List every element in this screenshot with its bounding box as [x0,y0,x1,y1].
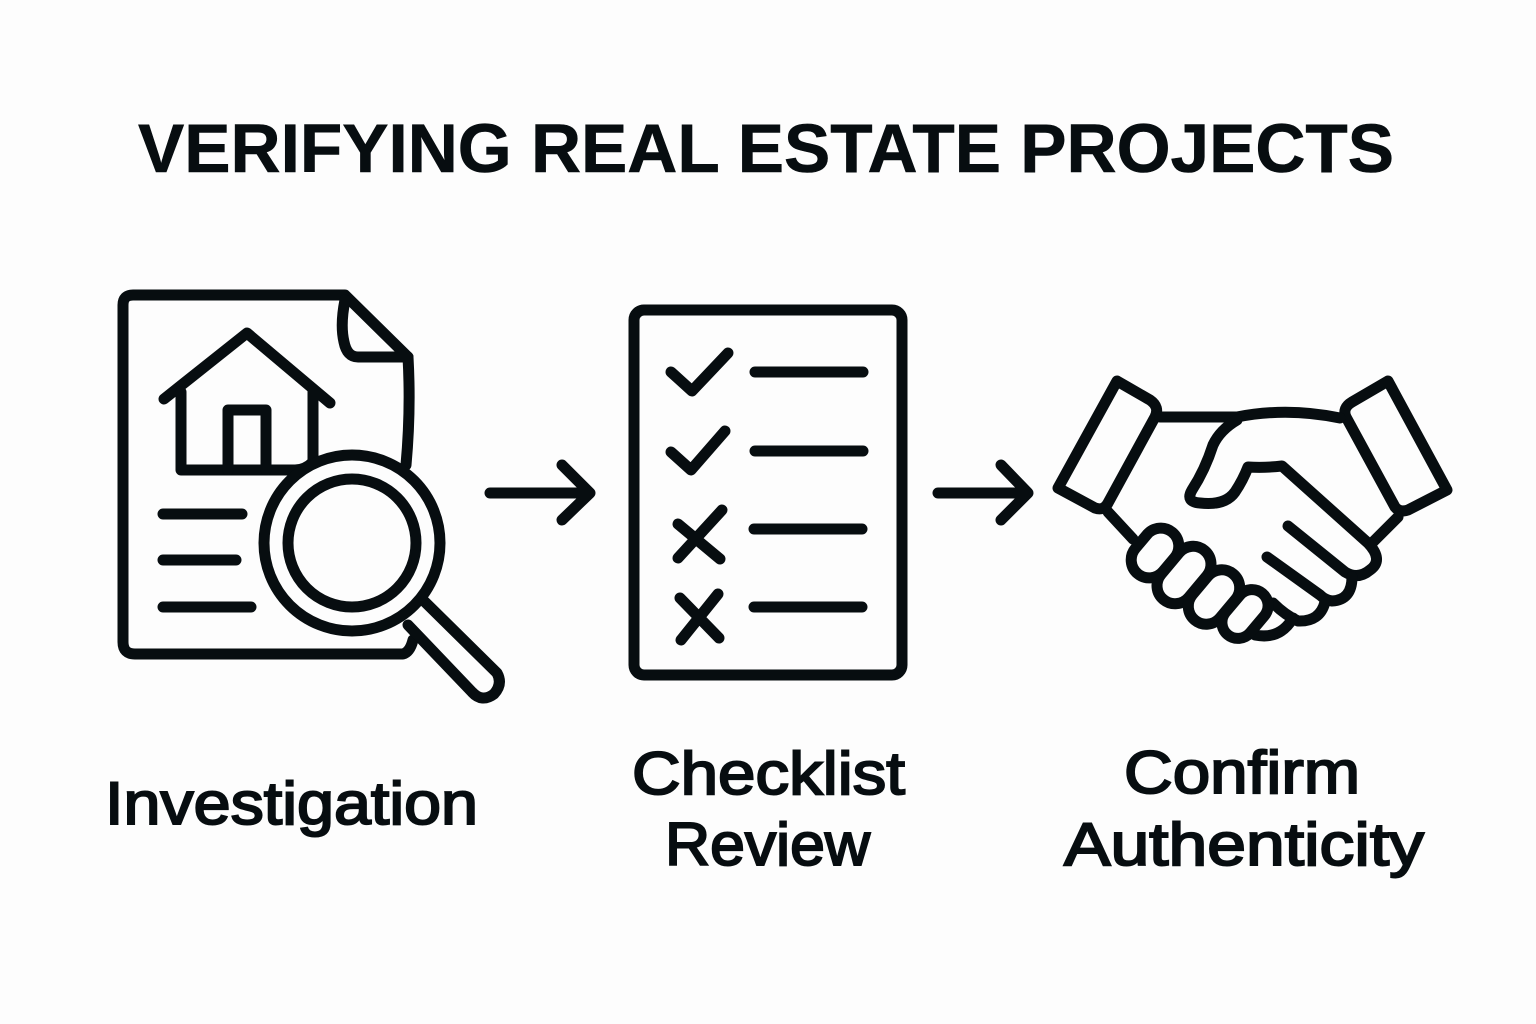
cross mark 1 [678,510,722,559]
right cuff [1345,381,1447,511]
icon: house [164,333,330,470]
label: confirm authenticity [1064,739,1424,878]
checklist lines [754,372,863,607]
icon: checklist [634,310,902,675]
label: checklist review: Review [665,811,871,878]
left fingers [1124,521,1275,645]
check mark 1 [671,353,728,391]
icon: magnifying glass [264,455,499,698]
document outline [123,295,413,654]
arrow: checklist to handshake [938,465,1028,520]
label: investigation: Investigation [105,770,478,837]
document text lines [163,514,251,607]
arrow: investigation to checklist [490,465,590,520]
document folded corner [342,300,408,357]
icon: handshake [1058,381,1447,645]
cross mark 2 [680,594,719,640]
title: VERIFYING REAL ESTATE PROJECTS [138,110,1394,187]
left cuff [1058,381,1157,509]
checklist board [634,310,902,675]
clasped hands outline [1160,412,1340,418]
check mark 2 [671,431,725,470]
label: confirm authenticity: Confirm [1124,739,1360,806]
icon: document with house and magnifying glass [123,295,499,698]
label: checklist review [632,740,905,878]
label: checklist review: Checklist [632,740,905,807]
label: confirm authenticity: Authenticity [1064,811,1424,878]
